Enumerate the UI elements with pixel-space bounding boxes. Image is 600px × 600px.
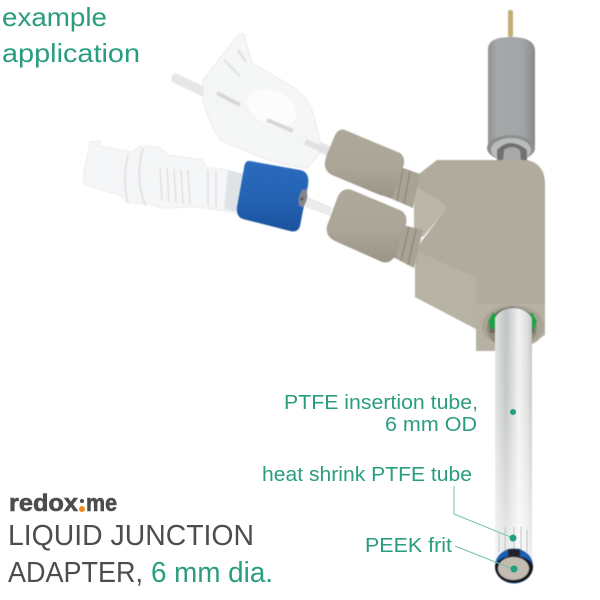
logo: redox.me: [9, 490, 117, 517]
label: PTFE insertion tube: 6 mm OD: [385, 414, 477, 436]
connector: clear luer fitting: [83, 141, 244, 213]
frit end cap: [495, 548, 533, 584]
lower knurled nut: [327, 189, 406, 262]
white tube from blue nut: [303, 196, 332, 216]
threaded stem upper: [385, 163, 420, 208]
blue nut: [237, 161, 309, 231]
connector: clear clip with white tube: [171, 34, 332, 168]
title: LIQUID JUNCTION: [8, 520, 254, 552]
heading: example application: application: [2, 38, 140, 68]
PEEK block body: [414, 160, 545, 351]
label: heat shrink PTFE tube: heat shrink PTFE tube: [262, 464, 472, 486]
label: PEEK frit: PEEK frit: [365, 535, 452, 557]
heat shrink section: [499, 527, 527, 552]
threaded stem lower: [387, 223, 423, 268]
PTFE insertion tube: [495, 308, 532, 569]
title: 6 mm dia.: [151, 557, 273, 589]
title: ADAPTER,: [8, 557, 143, 589]
logo: redox.me: me: [86, 490, 117, 517]
heading: example application: example: [2, 2, 107, 32]
grey sleeve and gold pin: [487, 10, 535, 162]
label: PTFE insertion tube: PTFE insertion tube,: [284, 392, 478, 414]
leader dots: [510, 409, 518, 572]
leader lines: [454, 486, 513, 569]
upper knurled nut: [325, 130, 404, 198]
logo: redox.me: redox: [9, 490, 79, 517]
